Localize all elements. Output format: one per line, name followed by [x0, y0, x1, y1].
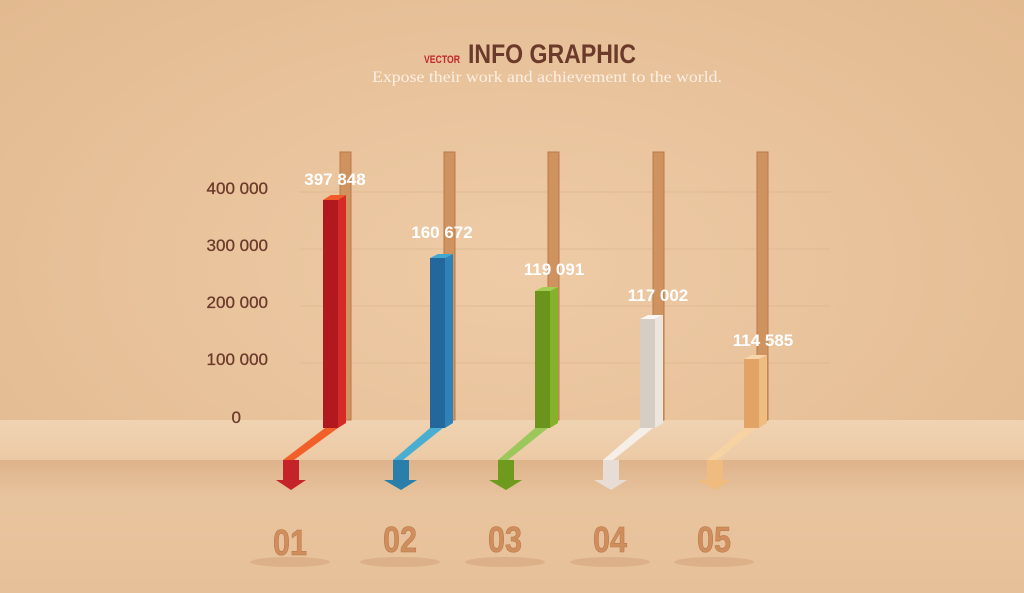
bar 03 green	[489, 287, 558, 490]
bar 05 orange	[698, 355, 767, 490]
value labels: 119 091	[524, 260, 584, 279]
category numbers: 03	[488, 519, 522, 560]
bar 02 blue	[384, 254, 453, 490]
y axis labels: 300 000	[207, 236, 268, 255]
category numbers: 02	[383, 519, 417, 560]
category numbers: 05	[697, 519, 731, 560]
category numbers: 04	[593, 519, 627, 560]
value labels: 397 848	[304, 170, 366, 189]
title: VECTOR	[424, 54, 460, 66]
category numbers: 01	[273, 522, 307, 563]
bar 01 red	[276, 195, 346, 490]
y axis labels: 100 000	[207, 350, 268, 369]
y axis labels	[207, 179, 268, 427]
category numbers	[250, 519, 754, 567]
y axis labels: 400 000	[207, 179, 268, 198]
y axis labels: 200 000	[207, 293, 268, 312]
value labels: 114 585	[733, 331, 793, 350]
y axis labels: 0	[232, 408, 241, 427]
title	[424, 39, 636, 69]
floor band	[0, 420, 1024, 460]
bar 04 white	[594, 315, 663, 490]
value labels	[304, 170, 793, 350]
back posts	[340, 152, 768, 420]
value labels: 160 672	[411, 223, 473, 242]
subtitle: Expose their work and achievement to the world.	[372, 69, 722, 86]
value labels: 117 002	[628, 286, 688, 305]
title: INFO GRAPHIC	[468, 39, 636, 69]
